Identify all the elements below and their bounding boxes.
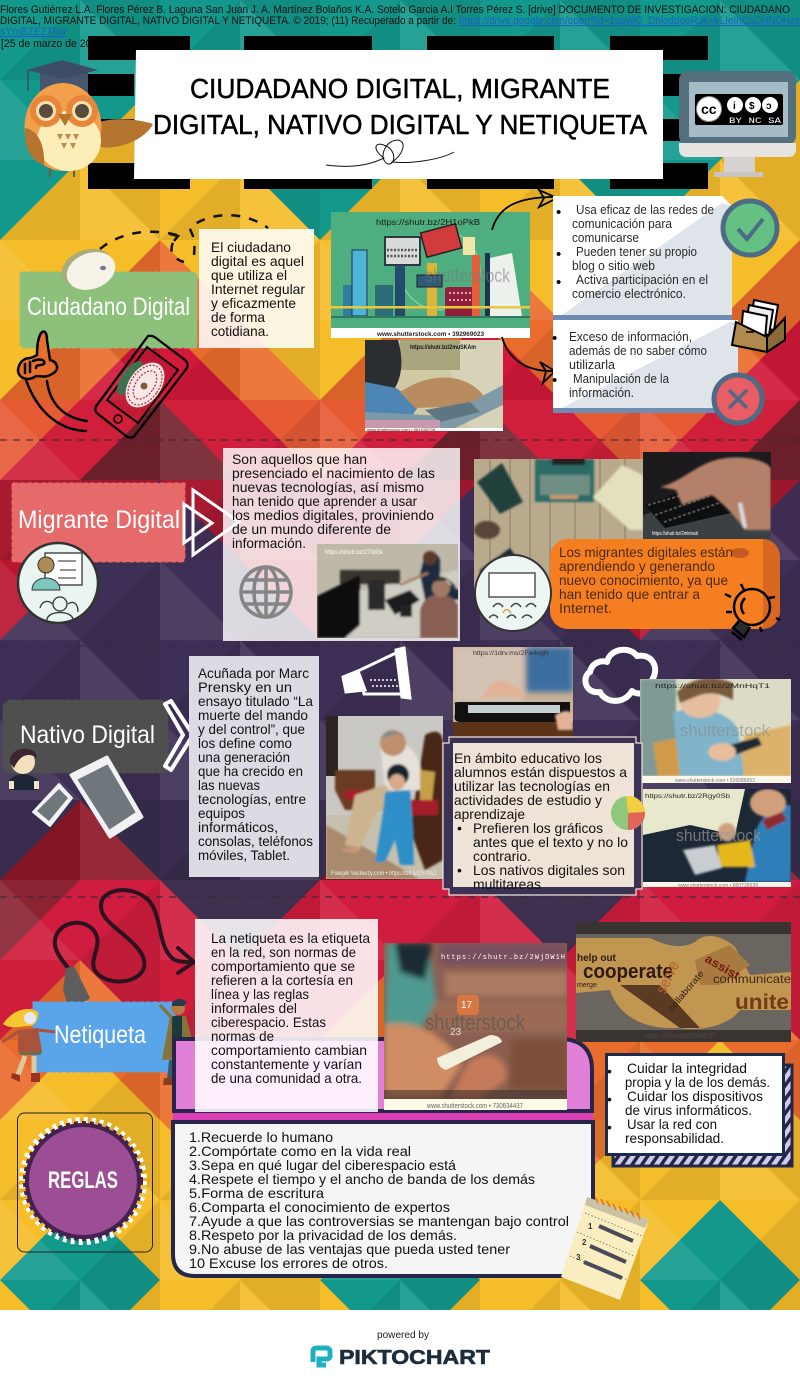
panel: migrantes digitales text: Los migrantes digitales están: [559, 544, 733, 560]
creative commons badge: $: [749, 101, 755, 112]
text block: definition of netiqueta: comportamiento cambian: [211, 1042, 367, 1058]
arrow to disadvantages: [502, 337, 555, 383]
icon: smartphone with Mexican flag fingerprint: [95, 336, 188, 438]
black bars behind title: [88, 36, 708, 189]
panel: disadvantages of digital citizens: Manipulación de la: [573, 371, 670, 386]
panel: advantages of digital citizens: comunicación para: [572, 216, 673, 231]
text block: rules list: 5.Forma de escritura: [189, 1185, 324, 1201]
icon: chevron: [165, 701, 193, 770]
panel: responsibility list: •: [607, 1119, 612, 1135]
citation text: DIGITAL, MIGRANTE DIGITAL, NATIVO DIGITAL Y NETIQUETA. © 2019; (11) Recuperado a partir de:: [0, 15, 456, 27]
icon: notepad: 3: [576, 1253, 581, 1262]
panel: advantages of digital citizens: •: [556, 274, 561, 291]
photo: desk with typewriter: [474, 455, 643, 594]
photo: word cloud handshake: communicate: [713, 972, 791, 986]
text block: rules list: 3.Sepa en qué lugar del ciberespacio está: [189, 1157, 456, 1173]
text block: definition of migrante digital: Son aquellos que han: [232, 451, 367, 467]
icon: Piktochart logo: [313, 1348, 330, 1365]
text block: rules list: [189, 1129, 569, 1271]
icon: man character: [160, 999, 197, 1085]
photo: word cloud handshake: https://shutr.bz/2Wxb7P: [645, 1033, 715, 1040]
badge: reglas: REGLAS: [48, 1167, 118, 1194]
dashed arrow from mouse to definition: [100, 215, 268, 262]
icon: young person avatar: [9, 749, 39, 790]
text block: definition of migrante digital: [223, 448, 460, 641]
panel: responsibility list: [606, 1054, 792, 1166]
icon: cross circle: [714, 375, 762, 423]
icon: teacher and students circle: [18, 543, 98, 623]
panel: responsibility list: Cuidar los dispositivos: [627, 1088, 763, 1104]
arrow to advantages: [492, 190, 557, 230]
photo: digital city illustration: www.shutterstock.com • 392969023: [376, 332, 485, 338]
panel: nativos digitales in education: aprendizaje: [454, 806, 525, 822]
panel: nativos digitales in education: antes que el texto y no lo: [473, 834, 628, 850]
icon: electric plug: [63, 966, 90, 1013]
text block: rules list: 8.Respeto por la privacidad de los demás.: [189, 1227, 457, 1243]
text block: definition of nativo digital: muerte del mando: [198, 707, 308, 723]
plug cable arrow: [55, 890, 194, 982]
text block: rules list: 4.Respete el tiempo y el ancho de banda de los demás: [189, 1171, 535, 1187]
creative commons badge: BY NC SA: [729, 117, 781, 126]
icon: girl character: [2, 1009, 55, 1082]
icon: thought cloud: [585, 650, 655, 701]
panel: advantages of digital citizens: comercio electrónico.: [572, 286, 686, 301]
text block: definition of migrante digital: información.: [232, 535, 306, 551]
panel: nativos digitales in education: multitareas: [473, 876, 541, 892]
photo: father and child with devices: www.shutterstock.com • 660726639: [678, 883, 758, 889]
photo: older woman learning computers: [317, 544, 460, 638]
text block: definition of netiqueta: normas de: [211, 1028, 274, 1044]
text block: rules list: 2.Compórtate como en la vida real: [189, 1143, 411, 1159]
text block: definition of netiqueta: La netiqueta es la etiqueta: [211, 930, 370, 946]
icon: double play arrows: [184, 490, 239, 555]
text block: definition of nativo digital: los define como: [198, 735, 292, 751]
text block: definition of migrante digital: nuevas tecnologías, así mismo: [232, 479, 424, 495]
panel: disadvantages of digital citizens: utilizarla: [569, 357, 616, 372]
text block: definition of nativo digital: una generación: [198, 749, 290, 765]
icon: monitor with creative commons badge: [679, 71, 796, 177]
text block: definition of migrante digital: de un mundo diferente de: [232, 521, 391, 537]
icon: light bulb: [725, 584, 780, 640]
panel: advantages of digital citizens: blog o sitio web: [572, 258, 655, 273]
icon: two smartphones: [33, 757, 142, 837]
text block: definition of migrante digital: los medios digitales, proviniendo: [232, 507, 434, 523]
panel: migrantes digitales text: [550, 539, 780, 629]
section: Nativo Digital label: Nativo Digital: [20, 721, 155, 749]
photo: word cloud handshake: unite: [735, 991, 789, 1014]
text block: definition of netiqueta: en la red, son normas de: [211, 944, 356, 960]
icon: file box: [732, 300, 785, 352]
section: Migrante Digital label: [14, 485, 183, 560]
panel: disadvantages of digital citizens: •: [552, 372, 557, 389]
citation text: [0, 4, 800, 50]
text block: definition of nativo digital: que ha crecido en: [198, 763, 303, 779]
title panel: DIGITAL, NATIVO DIGITAL Y NETIQUETA: [153, 109, 647, 140]
panel: migrantes digitales text: nuevo conocimiento, ya que: [559, 572, 728, 588]
text block: definition of netiqueta: constantemente y varían: [211, 1056, 362, 1072]
photo: digital city illustration: [331, 212, 530, 338]
photo: hands on a laptop: [365, 340, 503, 432]
panel: advantages of digital citizens: Activa participación en el: [576, 272, 708, 287]
icon: notepad: [561, 1197, 649, 1300]
text block: definition of nativo digital: las nuevas: [198, 777, 260, 793]
photo: hand holding smartphone with notifications: [384, 943, 567, 1110]
section: Ciudadano Digital label: Ciudadano Digital: [27, 293, 190, 321]
panel: nativos digitales in education: actividades de estudio y: [454, 792, 602, 808]
photo: toddler with phone: [640, 678, 791, 784]
panel: migrantes digitales text: aprendiendo y generando: [559, 558, 715, 574]
photo: father and child with devices: shutterstock: [676, 826, 761, 845]
photo: child using tablet: https://1drv.ms/2Fa4vgR: [473, 651, 550, 657]
creative commons badge: i: [733, 101, 736, 112]
photo: digital city illustration: shutterstock: [425, 266, 510, 287]
badge: reglas: [18, 1113, 152, 1252]
photo: word cloud handshake: help out: [577, 953, 617, 964]
footer: powered by Piktochart: powered by: [377, 1330, 429, 1341]
panel: responsibility list: propia y la de los demás.: [625, 1074, 770, 1090]
text block: rules list: 9.No abuse de las ventajas que pueda usted tener: [189, 1241, 510, 1257]
text block: definition of nativo digital: tecnologías, entre: [198, 791, 306, 807]
panel: advantages of digital citizens: •: [556, 246, 561, 263]
text block: definition of netiqueta: de una comunidad a otra.: [211, 1070, 362, 1086]
photo: hand holding smartphone with notifications: 17: [461, 1000, 473, 1011]
panel: disadvantages of digital citizens: [552, 320, 738, 413]
text block: definition of ciudadano digital: cotidiana.: [211, 323, 269, 339]
section: Ciudadano Digital label: [22, 274, 195, 346]
panel: disadvantages of digital citizens: además de no saber cómo: [569, 343, 707, 358]
text block: definition of ciudadano digital: Internet regular: [211, 281, 305, 297]
photo: older woman learning computers: https://shutr.bz/2TtdGk: [325, 550, 384, 556]
text block: definition of nativo digital: móviles, Tablet.: [198, 847, 290, 863]
panel: rules frame: [172, 1039, 594, 1276]
footer: powered by Piktochart: PIKTOCHART: [339, 1347, 490, 1369]
creative commons badge: [695, 94, 783, 126]
icon: classroom circle: [475, 555, 551, 631]
title panel: [134, 50, 663, 179]
icon: globe: [241, 567, 291, 617]
panel: responsibility list: •: [607, 1063, 612, 1079]
text block: definition of ciudadano digital: digital es aquel: [211, 253, 304, 269]
icon: notepad: 2: [582, 1238, 587, 1247]
photo: toddler with phone: https://shutr.bz/2MnHqT1: [655, 684, 771, 690]
photo: word cloud handshake: cooperate: [583, 961, 673, 983]
panel: responsibility list: de virus informáticos.: [625, 1102, 752, 1118]
photo: hand holding smartphone with notifications: www.shutterstock.com • 730634437: [426, 1103, 523, 1110]
text block: definition of nativo digital: ensayo titulado “La: [198, 693, 313, 709]
panel: disadvantages of digital citizens: •: [552, 330, 557, 347]
panel: advantages of digital citizens: Usa eficaz de las redes de: [576, 202, 714, 217]
photo: hand holding smartphone with notifications: 23: [450, 1027, 462, 1038]
panel: nativos digitales in education: utilizar las tecnologías en: [454, 778, 610, 794]
panel: advantages of digital citizens: •: [556, 204, 561, 221]
photo: father and child with devices: [643, 789, 791, 889]
section: Migrante Digital label: Migrante Digital: [18, 506, 180, 534]
panel: advantages of digital citizens: [553, 196, 732, 320]
panel: advantages of digital citizens: comunicarse: [572, 230, 639, 245]
photo: hand holding smartphone with notifications: shutterstock: [425, 1010, 526, 1035]
text block: definition of netiqueta: refieren a la cortesía en: [211, 972, 353, 988]
panel: migrantes digitales text: Internet.: [559, 600, 612, 616]
photo: older hands typing: [643, 452, 771, 539]
text block: definition of nativo digital: equipos: [198, 805, 245, 821]
panel: migrantes digitales text: han tenido que entrar a: [559, 586, 700, 602]
photo: word cloud handshake: serve: [653, 959, 683, 997]
panel: disadvantages of digital citizens: Exceso de información,: [569, 329, 692, 344]
citation text: [25 de marzo de 2019]: [1, 38, 106, 50]
text block: definition of netiqueta: [195, 919, 378, 1112]
photo: child using tablet: [453, 647, 573, 737]
text block: definition of nativo digital: consolas, teléfonos: [198, 833, 313, 849]
text block: definition of netiqueta: informales del: [211, 1000, 297, 1016]
text block: definition of nativo digital: [189, 656, 319, 877]
icon: thought bubbles: [648, 702, 682, 734]
text block: definition of nativo digital: informáticos,: [198, 819, 278, 835]
icon: owl with graduation cap: [24, 60, 153, 177]
panel: responsibility list: •: [607, 1091, 612, 1107]
icon: notepad: 1: [588, 1222, 593, 1231]
text block: definition of nativo digital: y del control”, que: [198, 721, 305, 737]
photo: toddler with phone: www.shutterstock.com • 526086652: [675, 778, 755, 784]
text block: definition of ciudadano digital: El ciudadano: [211, 239, 291, 255]
citation text: sYmBZE2T6w: [0, 26, 66, 38]
text block: rules list: 7.Ayude a que las controversias se mantengan bajo control: [189, 1213, 569, 1229]
photo: word cloud handshake: collaborate: [666, 969, 706, 1013]
panel: nativos digitales in education: [443, 737, 642, 895]
panel: advantages of digital citizens: Pueden tener su propio: [576, 244, 697, 259]
icon: megaphone: [343, 648, 410, 698]
section: Nativo Digital label: [5, 702, 166, 771]
photo: word cloud handshake: merge: [577, 982, 597, 989]
panel: nativos digitales in education: Prefieren los gráficos: [473, 820, 603, 836]
section: Netiqueta label: [35, 1004, 173, 1070]
photo: hands on a laptop: https://shutr.bz/2muSKAm: [410, 345, 476, 351]
creative commons badge: cc: [701, 101, 717, 117]
photo: father and child with devices: https://shutr.bz/2Rgy0Sb: [645, 794, 731, 800]
text block: definition of migrante digital: presenciado el nacimiento de las: [232, 465, 435, 481]
photo: digital city illustration: https://shutr.bz/2H1oPkB: [376, 218, 480, 227]
panel: nativos digitales in education: contrario.: [473, 848, 531, 864]
photo: grandfather and child with phones: Freepik Vecteezy.com • https://bit.ly/2YrPeJ: [331, 871, 436, 877]
panel: nativos digitales in education: alumnos están dispuestos a: [454, 764, 627, 780]
creative commons badge: ↄ: [766, 101, 772, 112]
panel: responsibility list: Usar la red con: [627, 1116, 717, 1132]
pie chart icon: [611, 796, 645, 830]
text block: definition of netiqueta: línea y las reglas: [211, 986, 309, 1002]
photo: word cloud handshake: [576, 922, 791, 1042]
text block: definition of netiqueta: ciberespacio. Estas: [211, 1014, 326, 1030]
text block: definition of migrante digital: han tenido que aprender a usar: [232, 493, 417, 509]
icon: pointing hand: [18, 331, 87, 431]
text block: definition of ciudadano digital: y eficazmente: [211, 295, 296, 311]
icon: computer mouse: [56, 242, 121, 296]
text block: definition of ciudadano digital: de forma: [211, 309, 265, 325]
panel: nativos digitales in education: •: [457, 820, 462, 836]
text block: rules list: 1.Recuerde lo humano: [189, 1129, 333, 1145]
photo: hand holding smartphone with notifications: https://shutr.bz/2WjDW1H: [441, 954, 565, 962]
panel: responsibility list: responsabilidad.: [625, 1130, 724, 1146]
text block: rules list: 10 Excuse los errores de otros.: [189, 1255, 388, 1271]
panel: disadvantages of digital citizens: información.: [569, 385, 634, 400]
photo: grandfather and child with phones: [326, 716, 443, 879]
text block: definition of netiqueta: comportamiento que se: [211, 958, 355, 974]
panel: nativos digitales in education: •: [457, 862, 462, 878]
panel: nativos digitales in education: Los nativos digitales son: [473, 862, 625, 878]
text block: definition of ciudadano digital: [199, 229, 314, 348]
panel: responsibility list: Cuidar la integridad: [627, 1060, 747, 1076]
icon: check mark circle: [723, 201, 777, 255]
text block: rules list: 6.Comparta el conocimiento de expertos: [189, 1199, 450, 1215]
photo: older hands typing: https://shutr.bz/2mkmab: [652, 531, 698, 537]
photo: toddler with phone: shutterstock: [680, 721, 770, 740]
section: Netiqueta label: Netiqueta: [54, 1021, 146, 1049]
title panel: CIUDADANO DIGITAL, MIGRANTE: [190, 73, 610, 104]
text block: definition of nativo digital: Prensky en un: [198, 679, 292, 695]
text block: definition of ciudadano digital: que utiliza el: [211, 267, 287, 283]
photo: word cloud handshake: assist: [702, 951, 742, 983]
panel: nativos digitales in education: En ámbito educativo los: [454, 750, 602, 766]
text block: definition of nativo digital: Acuñada por Marc: [198, 665, 309, 681]
photo: hands on a laptop: www.shutterstock.com • 564938798: [367, 427, 436, 432]
footer: powered by Piktochart: [0, 1310, 800, 1390]
